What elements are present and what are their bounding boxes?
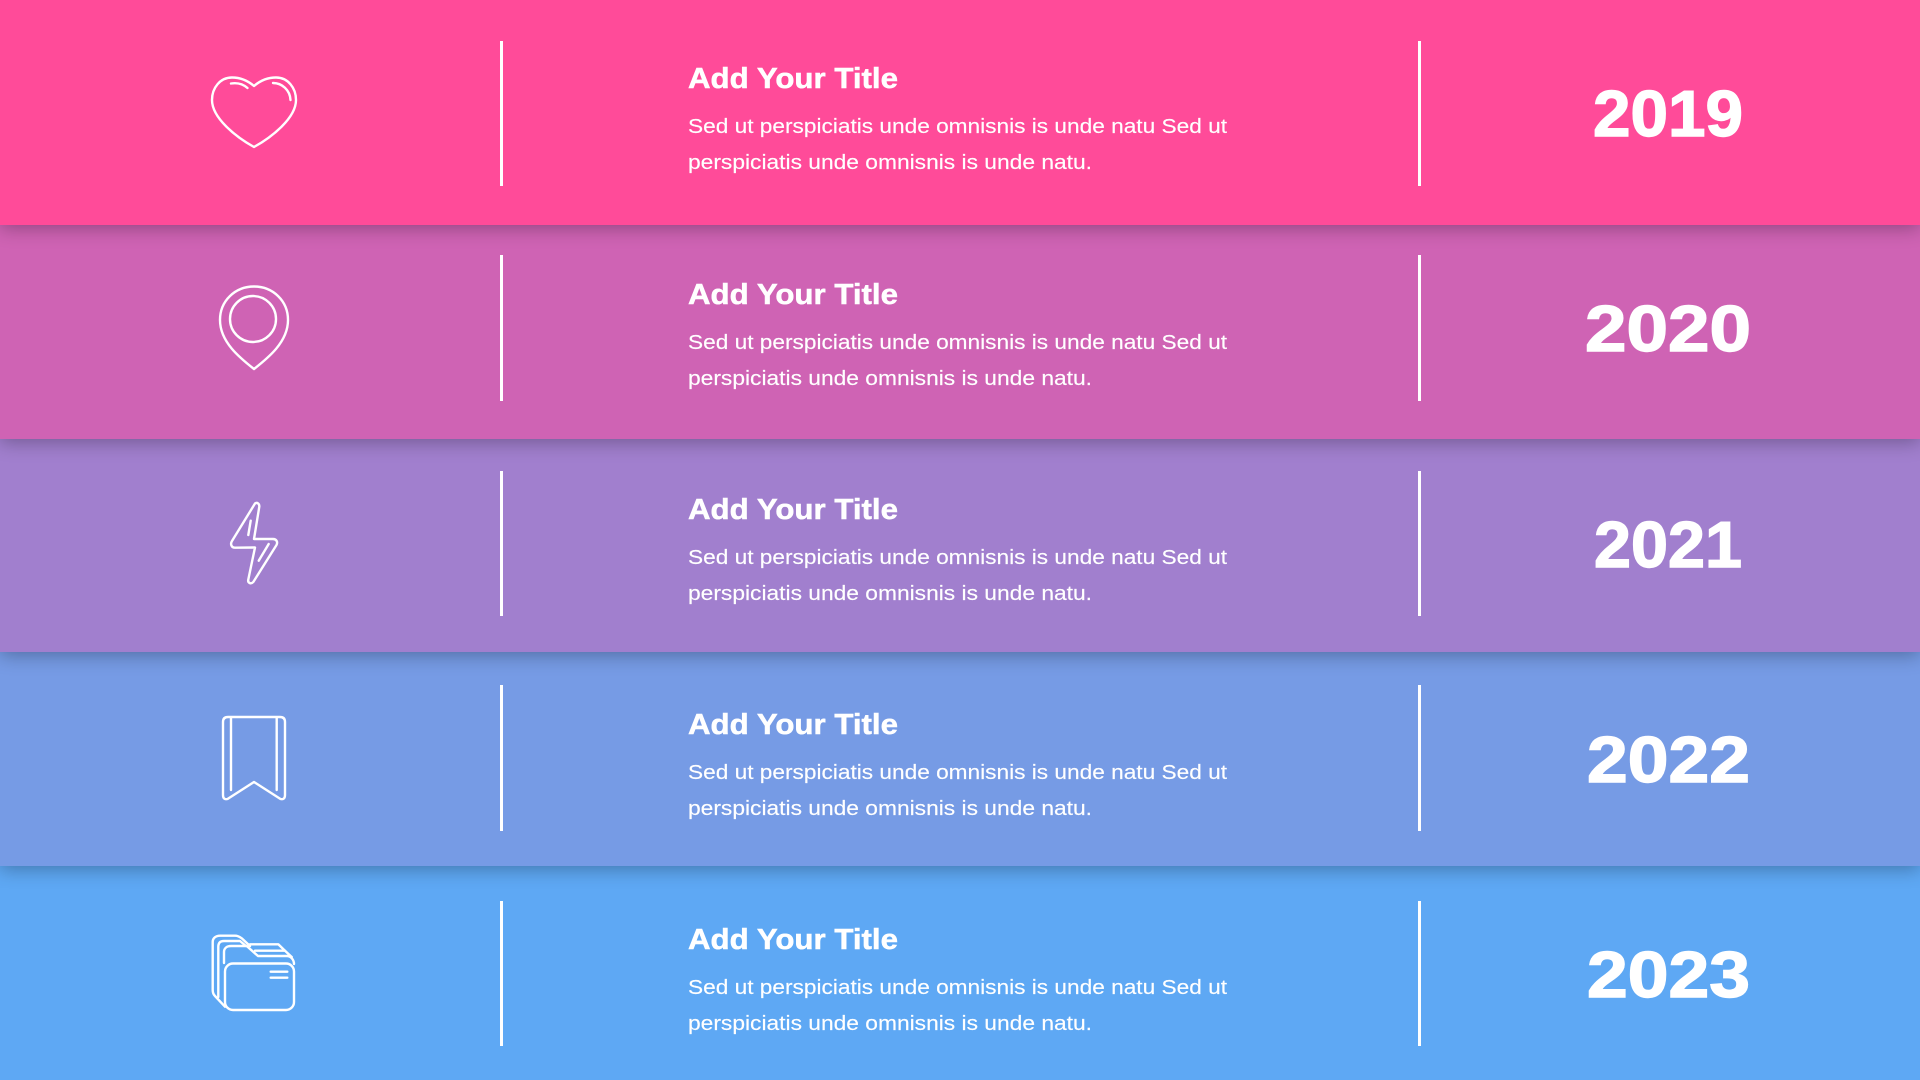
body text: perspiciatis unde omnisnis is unde natu. [688,583,1092,605]
icon: lightning bolt [231,503,277,583]
icon: heart [212,78,296,147]
panel: 2023 band [0,866,1920,1080]
left divider [500,471,503,616]
panel: 2021 band [0,439,1920,652]
title: Add Your Title [688,494,898,526]
year: 2019 [1593,77,1743,150]
left divider [500,41,503,186]
title: Add Your Title [688,279,898,311]
year: 2023 [1587,938,1750,1011]
body text [688,116,1227,174]
left divider [500,685,503,831]
right divider [1418,471,1421,616]
body text [688,762,1227,820]
body text: Sed ut perspiciatis unde omnisnis is unde natu Sed ut [688,116,1227,138]
left divider [500,255,503,401]
right divider [1418,255,1421,401]
body text: perspiciatis unde omnisnis is unde natu. [688,1013,1092,1035]
year: 2022 [1587,723,1750,796]
left divider [500,901,503,1046]
body text [688,332,1227,390]
right divider [1418,685,1421,831]
title: Add Your Title [688,709,898,741]
body text [688,977,1227,1035]
body text: Sed ut perspiciatis unde omnisnis is unde natu Sed ut [688,977,1227,999]
year: 2020 [1585,292,1751,365]
body text: perspiciatis unde omnisnis is unde natu. [688,152,1092,174]
body text: Sed ut perspiciatis unde omnisnis is unde natu Sed ut [688,547,1227,569]
title: Add Your Title [688,63,898,95]
panel: 2020 band [0,225,1920,439]
body text: perspiciatis unde omnisnis is unde natu. [688,798,1092,820]
body text: Sed ut perspiciatis unde omnisnis is unde natu Sed ut [688,762,1227,784]
body text: Sed ut perspiciatis unde omnisnis is unde natu Sed ut [688,332,1227,354]
year: 2021 [1594,508,1742,581]
title: Add Your Title [688,924,898,956]
icon: folders [213,936,294,1010]
panel: 2019 band [0,0,1920,225]
body text [688,547,1227,605]
body text: perspiciatis unde omnisnis is unde natu. [688,368,1092,390]
icon: bookmark [223,717,285,799]
right divider [1418,901,1421,1046]
panel: 2022 band [0,652,1920,866]
icon: location pin [220,286,288,369]
right divider [1418,41,1421,186]
